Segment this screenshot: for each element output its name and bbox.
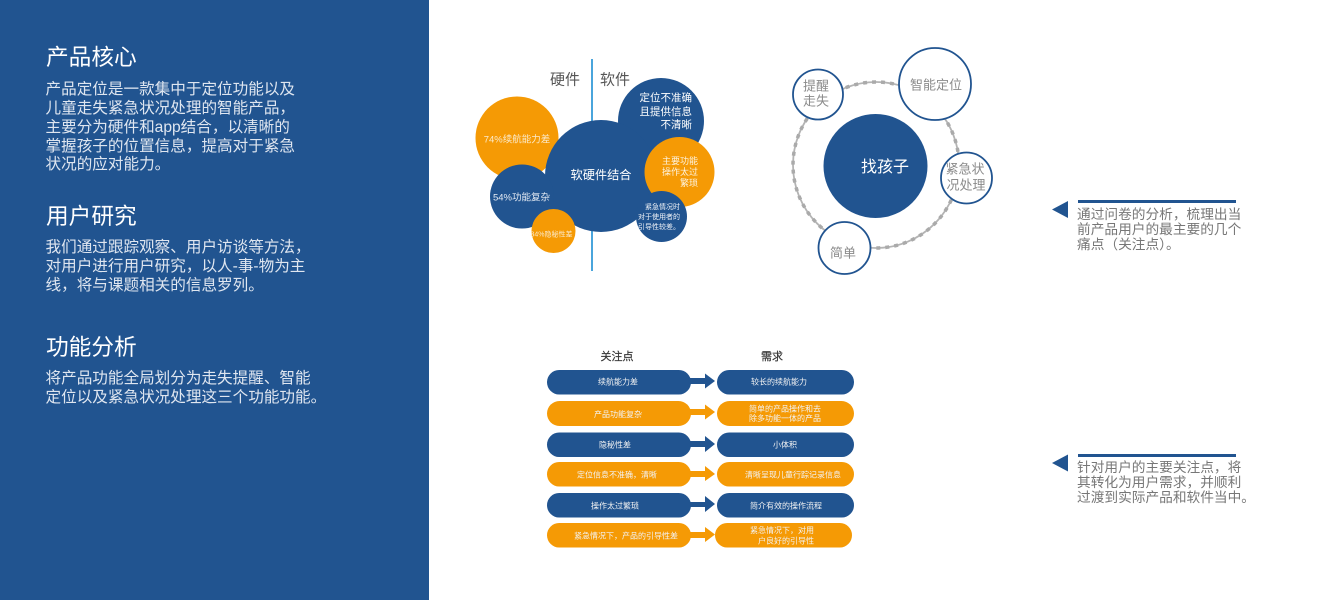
row 1 xyxy=(547,370,854,394)
note: user needs: 其转化为用户需求，并顺利 xyxy=(1077,474,1241,490)
bubble: 软硬件结合 xyxy=(545,120,657,232)
row 1: 续航能力差 xyxy=(598,376,638,386)
note: questionnaire analysis: 前产品用户的最主要的几个 xyxy=(1077,221,1242,237)
dashed ring xyxy=(793,82,959,248)
row 6 xyxy=(547,523,852,548)
row 3 xyxy=(547,432,854,457)
text block: 用户研究 body: 我们通过跟踪观察、用户访谈等方法， xyxy=(46,238,311,256)
bubble: 定位不准确: 定位不准确 xyxy=(640,91,692,104)
text block: 产品核心 body: 掌握孩子的位置信息，提高对于紧急 xyxy=(46,137,295,155)
center circle: 找孩子 xyxy=(824,114,928,218)
node: 提醒走失: 走失 xyxy=(803,94,829,108)
label: 软件: 软件 xyxy=(600,72,630,88)
note: questionnaire analysis: 痛点（关注点）。 xyxy=(1077,236,1180,252)
table: concerns to needs xyxy=(547,349,854,548)
row 3: 小体积 xyxy=(773,440,797,450)
bubble: 定位不准确: 不清晰 xyxy=(660,118,692,131)
row 1: 较长的续航能力 xyxy=(751,376,807,386)
heading: 功能分析: 功能分析 xyxy=(46,334,137,360)
text block: 功能分析 body: 将产品功能全局划分为走失提醒、智能 xyxy=(46,369,311,387)
text block: 产品核心 body: 主要分为硬件和app结合，以清晰的 xyxy=(46,118,290,136)
row 2: 除多功能一体的产品 xyxy=(749,413,821,423)
icon: left triangle xyxy=(1052,454,1068,472)
node: 紧急状况处理: 紧急状 xyxy=(945,162,985,176)
bubble: 紧急情况 xyxy=(636,191,687,242)
panel: left sidebar xyxy=(0,0,429,600)
note: user needs xyxy=(1052,454,1255,505)
note: user needs: 针对用户的主要关注点，将 xyxy=(1077,459,1241,475)
bubble: 紧急情况: 引导性较差。 xyxy=(638,222,680,231)
note: user needs: 过渡到实际产品和软件当中。 xyxy=(1077,490,1255,505)
row 2: 简单的产品操作和去 xyxy=(749,404,821,414)
row 4 xyxy=(547,462,854,486)
text block: 用户研究 body: 线，将与课题相关的信息罗列。 xyxy=(46,276,264,294)
icon: left triangle xyxy=(1052,201,1068,218)
text block: 产品核心 body: 产品定位是一款集中于定位功能以及 xyxy=(46,80,295,98)
text block: 用户研究 body xyxy=(46,238,311,294)
row 6: 紧急情况下，对用 xyxy=(750,525,814,535)
bubble: 主要功能操作太过繁琐: 主要功能 xyxy=(662,155,698,166)
row 5 xyxy=(547,493,854,518)
row 6: 户良好的引导性 xyxy=(758,536,814,546)
heading: 用户研究: 用户研究 xyxy=(46,203,137,229)
bubble: 定位不准确 xyxy=(618,78,704,164)
bubble: 74%续航能力差 xyxy=(476,96,558,180)
text block: 产品核心 body: 状况的应对能力。 xyxy=(46,154,170,173)
bubble: 74%续航能力差: 74%续航能力差 xyxy=(484,134,550,146)
row 3: 隐秘性差 xyxy=(599,440,631,450)
label: 硬件: 硬件 xyxy=(550,72,580,88)
text block: 产品核心 body xyxy=(46,80,295,173)
note: questionnaire analysis: 通过问卷的分析，梳理出当 xyxy=(1077,207,1241,222)
row 2 xyxy=(547,401,854,426)
center circle: 找孩子: 找孩子 xyxy=(861,158,909,176)
bubble: 软硬件结合: 软硬件结合 xyxy=(571,167,631,182)
node: 简单: 简单 xyxy=(830,246,856,260)
bubble: 34%隐秘性差: 34%隐秘性差 xyxy=(530,230,573,238)
bubble: 34%隐秘性差 xyxy=(530,209,576,253)
bubble: 紧急情况: 对于使用者的 xyxy=(638,212,680,221)
diagram: find child ring xyxy=(793,48,992,274)
heading: 产品核心: 产品核心 xyxy=(46,44,137,70)
row 4: 清晰呈现儿童行踪记录信息 xyxy=(745,470,841,480)
node: 简单 xyxy=(818,222,870,274)
node: 智能定位 xyxy=(899,48,971,120)
text block: 产品核心 body: 儿童走失紧急状况处理的智能产品， xyxy=(46,98,295,117)
text block: 功能分析 body: 定位以及紧急状况处理这三个功能功能。 xyxy=(46,388,326,406)
row 4: 定位信息不准确，清晰 xyxy=(577,470,657,480)
node: 提醒走失 xyxy=(793,70,843,120)
chart: hardware and software bubbles xyxy=(476,59,714,271)
node: 紧急状况处理: 况处理 xyxy=(946,178,986,192)
bubble: 定位不准确: 且提供信息 xyxy=(640,105,692,118)
bubble: 紧急情况: 紧急情况时 xyxy=(645,202,680,211)
bubble: 54%功能复杂: 54%功能复杂 xyxy=(493,192,551,204)
note: questionnaire analysis xyxy=(1052,200,1242,252)
text block: 功能分析 body xyxy=(46,369,326,406)
node: 提醒走失: 提醒 xyxy=(803,78,829,94)
bubble: 54%功能复杂 xyxy=(490,164,559,228)
node: 智能定位: 智能定位 xyxy=(910,78,962,92)
bubble: 主要功能操作太过繁琐 xyxy=(644,137,714,207)
row 6: 紧急情况下，产品的引导性差 xyxy=(574,530,678,540)
row 5: 简介有效的操作流程 xyxy=(750,500,822,510)
divider line xyxy=(591,59,593,271)
bubble: 主要功能操作太过繁琐: 繁琐 xyxy=(680,177,698,188)
node: 紧急状况处理 xyxy=(941,152,992,204)
bubble: 主要功能操作太过繁琐: 操作太过 xyxy=(662,166,698,177)
row 2: 产品功能复杂 xyxy=(594,409,642,419)
row 5: 操作太过繁琐 xyxy=(591,500,639,510)
header: 需求: 需求 xyxy=(761,350,783,363)
header: 关注点: 关注点 xyxy=(600,349,634,363)
text block: 用户研究 body: 对用户进行用户研究，以人-事-物为主 xyxy=(46,257,305,275)
